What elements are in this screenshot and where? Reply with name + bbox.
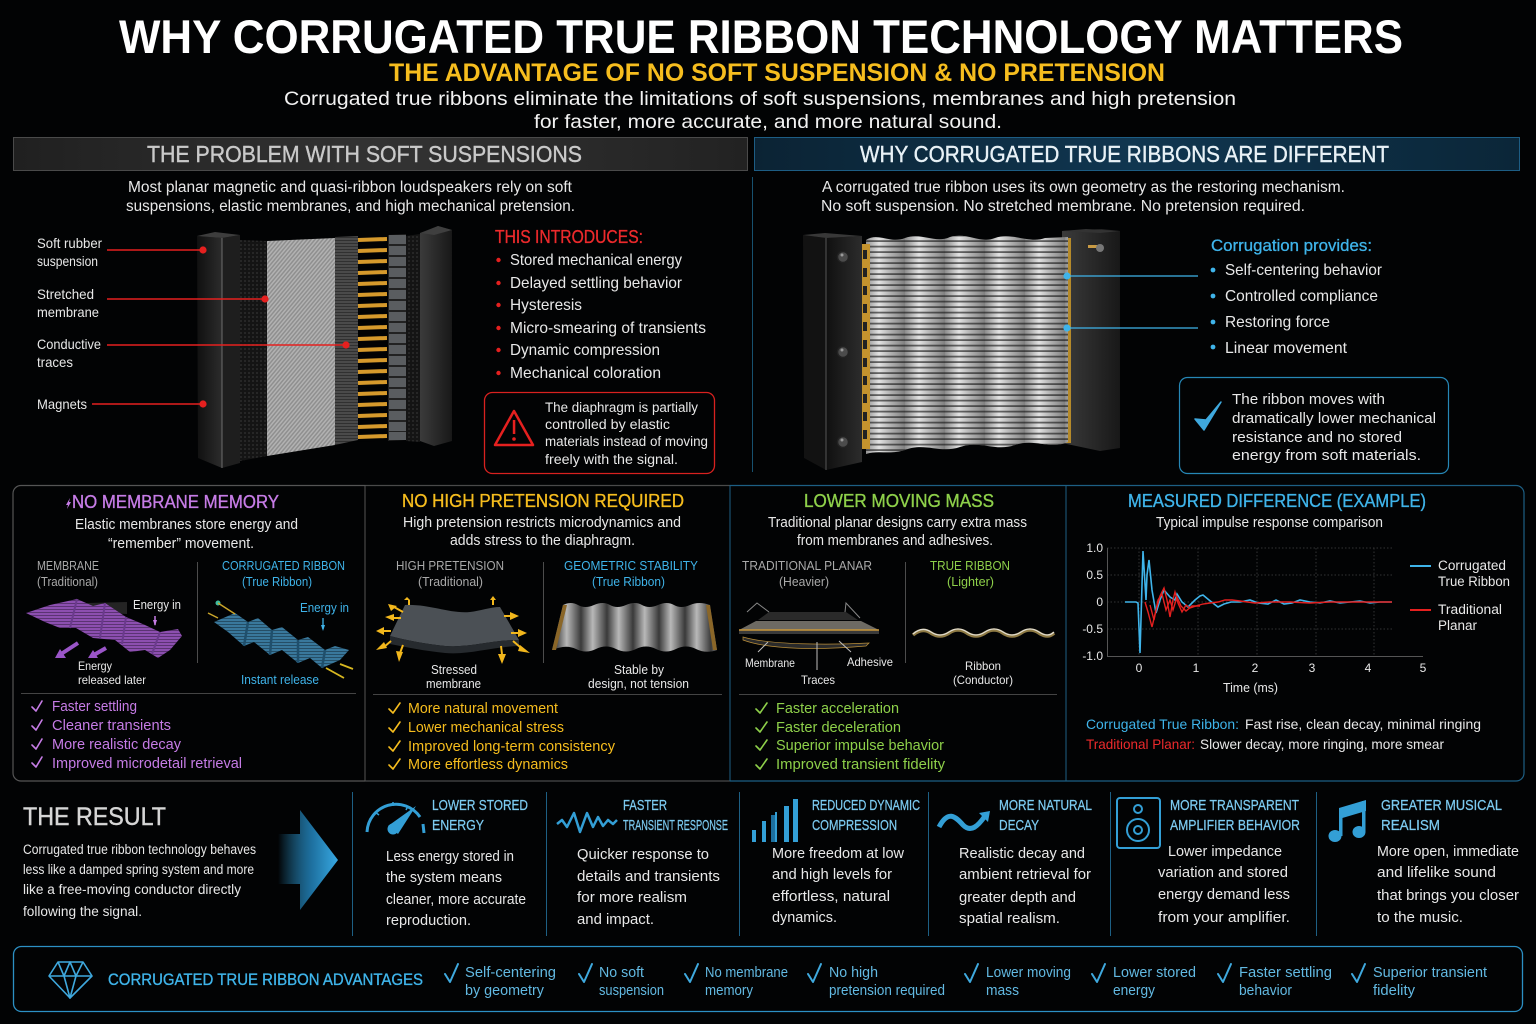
result: lower stored energy: LOWER STORED [432,798,528,814]
result: more transparent amplifier behavior: from your amplifier. [1158,910,1290,926]
advantage items: by geometry [465,983,545,999]
icon: check mark [1195,402,1221,430]
warning callout: materials instead of moving [545,434,708,449]
chart summary text: Traditional Planar: [1086,736,1195,752]
corrugated ribbon illustration [803,229,1120,470]
advantage items [465,965,1487,999]
panel: no high pretension required [373,491,722,773]
warning callout: controlled by elastic [545,417,670,432]
result: faster transient response: TRANSIENT RESPONSE [623,818,728,834]
panel: why corrugated true ribbons are different [752,138,1520,474]
icon: diamond [49,962,92,998]
corrugation provides list: Self-centering behavior [1225,262,1383,279]
benefit panels frame [13,485,1524,781]
curve: traditional planar [1145,588,1392,627]
advantage items: No high [829,965,878,981]
result: lower stored energy: reproduction. [386,913,471,929]
impulse response chart: Time (ms) [1223,681,1278,695]
benefits list: Improved transient fidelity [776,757,946,773]
panel: measured difference [1082,491,1510,752]
corrugation callout lines [1063,272,1198,332]
benefits list: Faster acceleration [776,701,899,717]
panel: lower moving mass [739,491,1057,773]
benefits list: Faster settling [52,699,137,715]
impulse response chart: 3 [1309,661,1316,675]
result: faster transient response: details and transients [577,869,720,885]
text: Corrugated true ribbon technology behaves [23,842,256,857]
intro text: for faster, more accurate, and more natural sound. [534,111,1002,133]
text: less like a damped spring system and more [23,862,254,877]
description [403,515,681,549]
benefits list: Improved microdetail retrieval [52,756,242,772]
benefits list: Cleaner transients [52,718,171,734]
result: more natural decay: Realistic decay and [959,846,1085,862]
advantage items: pretension required [829,983,945,999]
pretension column labels: GEOMETRIC STABILITY [564,558,698,573]
ribbon benefit callout: resistance and no stored [1232,429,1402,446]
section heading: different: WHY CORRUGATED TRUE RIBBONS ARE DIFFERENT [860,141,1389,167]
icon: signal bars [752,799,798,842]
section heading: different [754,138,1520,170]
advantage items: behavior [1239,983,1292,999]
result: greater musical realism: GREATER MUSICAL [1381,798,1502,814]
result: lower stored energy: Less energy stored in [386,849,514,865]
impulse response chart: 5 [1420,661,1427,675]
problem intro text [126,179,575,215]
purple membrane illustration: Energy [78,659,112,673]
chart legend: Planar [1438,618,1477,633]
ribbon intro text [821,179,1345,215]
result: more transparent amplifier behavior [1117,798,1300,926]
this introduces list: Dynamic compression [510,342,660,359]
result: reduced dynamic compression [752,798,920,926]
result: reduced dynamic compression: REDUCED DYNAMIC [812,798,920,814]
ribbon intro text: No soft suspension. No stretched membrane. No pretension required. [821,198,1305,215]
result: greater musical realism: that brings you closer [1377,888,1519,904]
heading: MEASURED DIFFERENCE (EXAMPLE) [1128,491,1426,511]
heading: LOWER MOVING MASS [804,491,994,511]
membrane column labels: CORRUGATED RIBBON [222,558,345,573]
advantage items: Faster settling [1239,965,1332,981]
benefits list [389,701,616,773]
the result block [23,803,338,919]
pretension column labels [396,558,698,589]
result: more natural decay: ambient retrieval for [959,867,1091,883]
purple membrane illustration: released later [78,673,146,687]
result: lower stored energy: ENERGY [432,818,484,834]
ribbon benefit callout: The ribbon moves with [1232,391,1385,408]
planar driver illustration [197,226,452,468]
result: more natural decay: MORE NATURAL [999,798,1092,814]
membrane column labels: (Traditional) [37,574,98,589]
description: from membranes and adhesives. [797,533,993,549]
ribbon benefit callout: energy from soft materials. [1232,447,1421,464]
icon: gauge [367,802,424,834]
text: following the signal. [23,904,142,919]
result: faster transient response [557,798,728,928]
impulse response chart: 0 [1136,661,1143,675]
result: reduced dynamic compression: effortless, natural [772,889,890,905]
callout labels: membrane [37,304,99,320]
stressed membrane illustration: membrane [426,677,481,691]
corrugation provides list: Corrugation provides: [1211,237,1372,255]
advantage items: Superior transient [1373,965,1487,981]
result: reduced dynamic compression: dynamics. [772,910,837,926]
benefits list [756,701,946,773]
purple membrane illustration [26,598,182,687]
advantage items: energy [1113,983,1156,999]
result: lower stored energy [367,798,528,929]
icon: waveform [557,813,617,832]
blue ribbon illustration [208,600,353,687]
chart summary text: Slower decay, more ringing, more smear [1200,736,1444,752]
ribbon benefit callout [1180,378,1448,474]
chart legend: Corrugated [1438,558,1506,573]
icon: wave arrow [939,811,990,828]
advantage items: No membrane [705,965,788,981]
advantage items: Self-centering [465,965,556,981]
membrane column labels: (True Ribbon) [242,574,312,589]
impulse response chart: 4 [1365,661,1372,675]
curve: corrugated true ribbon [1125,551,1392,653]
benefits list [32,699,242,772]
mass column labels [742,558,1010,589]
description: High pretension restricts microdynamics and [403,515,681,531]
section heading: problem: THE PROBLEM WITH SOFT SUSPENSIONS [147,141,582,167]
corrugation provides list [1211,237,1383,357]
result: more transparent amplifier behavior: AMPLIFIER BEHAVIOR [1170,818,1300,834]
icon: speaker [1117,798,1160,848]
chart legend: Traditional [1438,602,1502,617]
result: greater musical realism: REALISM [1381,818,1440,834]
result: lower stored energy: cleaner, more accurate [386,892,526,908]
advantage items: Lower moving [986,965,1071,981]
benefits list: More effortless dynamics [408,757,568,773]
traditional planar layers illustration: Membrane [745,656,795,670]
impulse response chart: 0 [1096,595,1103,609]
impulse response chart [1082,541,1427,695]
result: more transparent amplifier behavior: Lower impedance [1168,844,1282,860]
mass column labels: TRADITIONAL PLANAR [742,558,872,573]
intro text [284,88,1236,133]
result: greater musical realism [1328,798,1519,926]
result: more transparent amplifier behavior: energy demand less [1158,887,1290,903]
callout labels [37,235,350,412]
description: Traditional planar designs carry extra mass [768,515,1027,531]
stressed membrane illustration [376,596,530,691]
result columns dividers [352,792,1316,936]
chart summary text [1086,716,1481,752]
result: more natural decay: greater depth and [959,890,1076,906]
text [23,842,256,919]
description: adds stress to the diaphragm. [450,533,635,549]
blue ribbon illustration: Instant release [241,673,319,687]
this introduces list: THIS INTRODUCES: [495,227,643,247]
blue ribbon illustration: Energy in [300,601,349,615]
result: faster transient response: and impact. [577,912,654,928]
traditional planar layers illustration [739,603,893,687]
advantage items: suspension [599,983,664,999]
result: more natural decay: spatial realism. [959,911,1060,927]
heading: THE RESULT [23,803,166,831]
mass column labels: (Heavier) [779,574,829,589]
corrugation provides list: Controlled compliance [1225,288,1378,305]
result: lower stored energy: the system means [386,870,502,886]
callout labels: traces [37,354,73,370]
description [75,517,298,552]
callout labels: Conductive [37,336,101,352]
corrugation provides list: Linear movement [1225,340,1348,357]
panel: no membrane memory [21,492,356,772]
callout labels: Magnets [37,396,87,412]
pretension column labels: (Traditional) [418,574,483,589]
advantage items: Lower stored [1113,965,1196,981]
description: Typical impulse response comparison [1156,515,1383,531]
description: Elastic membranes store energy and [75,517,298,533]
heading: NO HIGH PRETENSION REQUIRED [402,491,684,511]
result: greater musical realism: and lifelike sound [1377,865,1496,881]
section heading: problem [14,138,748,170]
benefits list: More realistic decay [52,737,182,753]
membrane column labels [37,558,345,589]
mass column labels: (Lighter) [947,574,994,589]
panel: the problem with soft suspensions [14,138,748,474]
traditional planar layers illustration: Adhesive [847,655,893,669]
problem intro text: Most planar magnetic and quasi-ribbon loudspeakers rely on soft [128,179,573,196]
result: reduced dynamic compression: COMPRESSION [812,818,897,834]
advantage items: No soft [599,965,644,981]
impulse response chart: 1.0 [1086,541,1103,555]
warning callout: The diaphragm is partially [545,400,698,415]
problem intro text: suspensions, elastic membranes, and high mechanical pretension. [126,198,575,215]
text: like a free-moving conductor directly [23,882,241,897]
advantage items: mass [986,983,1019,999]
this introduces list: Stored mechanical energy [510,252,682,269]
impulse response chart: 2 [1252,661,1259,675]
corrugation provides list: Restoring force [1225,314,1330,331]
ribbon intro text: A corrugated true ribbon uses its own geometry as the restoring mechanism. [822,179,1345,196]
callout labels: Soft rubber [37,235,102,251]
title: WHY CORRUGATED TRUE RIBBON TECHNOLOGY MATTERS [119,10,1403,63]
description [768,515,1027,549]
result: faster transient response: for more realism [577,890,687,906]
header [119,10,1403,133]
icon: music note [1328,800,1366,842]
benefits list: Faster deceleration [776,720,901,736]
this introduces list: Micro-smearing of transients [510,320,706,337]
geometric ribbon illustration: Stable by [614,663,665,677]
stressed membrane illustration: Stressed [431,663,477,677]
impulse response chart: 1 [1193,661,1200,675]
result: more transparent amplifier behavior: variation and stored [1158,865,1288,881]
pretension column labels: HIGH PRETENSION [396,558,504,573]
result: reduced dynamic compression: More freedom at low [772,846,905,862]
advantage check marks [445,964,1365,982]
result: reduced dynamic compression: and high levels for [772,867,892,883]
result: faster transient response: Quicker response to [577,847,709,863]
result: more transparent amplifier behavior: MORE TRANSPARENT [1170,798,1299,814]
advantage items: memory [705,983,754,999]
warning callout: freely with the signal. [545,452,678,467]
subtitle: THE ADVANTAGE OF NO SOFT SUSPENSION & NO PRETENSION [389,59,1165,87]
description: “remember” movement. [108,536,254,552]
chart legend [1410,558,1510,633]
heading: NO MEMBRANE MEMORY [72,492,279,512]
icon: warning triangle [495,411,533,445]
this introduces list [495,227,706,382]
impulse response chart: 0.5 [1086,568,1103,582]
pretension column labels: (True Ribbon) [592,574,665,589]
chart legend: True Ribbon [1438,574,1510,589]
lightweight ribbon illustration: (Conductor) [953,673,1013,687]
geometric ribbon illustration [552,603,717,691]
lightweight ribbon illustration [913,629,1054,687]
callout labels: suspension [37,253,98,269]
advantage items: fidelity [1373,983,1416,999]
this introduces list: Hysteresis [510,297,582,314]
this introduces list: Mechanical coloration [510,365,661,382]
benefits list: Lower mechanical stress [408,720,564,736]
result: faster transient response: FASTER [623,798,667,814]
benefits list: More natural movement [408,701,558,717]
intro text: Corrugated true ribbons eliminate the limitations of soft suspensions, membranes and high pretension [284,88,1236,110]
benefits list: Superior impulse behavior [776,738,944,754]
warning callout [484,392,714,474]
callout labels: Stretched [37,286,94,302]
result: more natural decay [939,798,1092,927]
result: greater musical realism: More open, immediate [1377,844,1519,860]
result: greater musical realism: to the music. [1377,910,1463,926]
ribbon benefit callout: dramatically lower mechanical [1232,410,1436,427]
chart summary text: Corrugated True Ribbon: [1086,716,1239,732]
benefits list: Improved long-term consistency [408,739,616,755]
mass column labels: TRUE RIBBON [930,558,1010,573]
arrow [278,810,338,910]
impulse response chart: -1.0 [1082,649,1103,663]
advantages bar [14,946,1522,1012]
this introduces list: Delayed settling behavior [510,275,683,292]
geometric ribbon illustration: design, not tension [588,677,689,691]
purple membrane illustration: Energy in [133,598,181,612]
impulse response chart: -0.5 [1082,622,1103,636]
result: more natural decay: DECAY [999,818,1039,834]
chart summary text: Fast rise, clean decay, minimal ringing [1245,716,1481,732]
traditional planar layers illustration: Traces [801,673,835,687]
lightweight ribbon illustration: Ribbon [965,659,1001,673]
advantages heading: CORRUGATED TRUE RIBBON ADVANTAGES [108,970,423,989]
membrane column labels: MEMBRANE [37,558,99,573]
